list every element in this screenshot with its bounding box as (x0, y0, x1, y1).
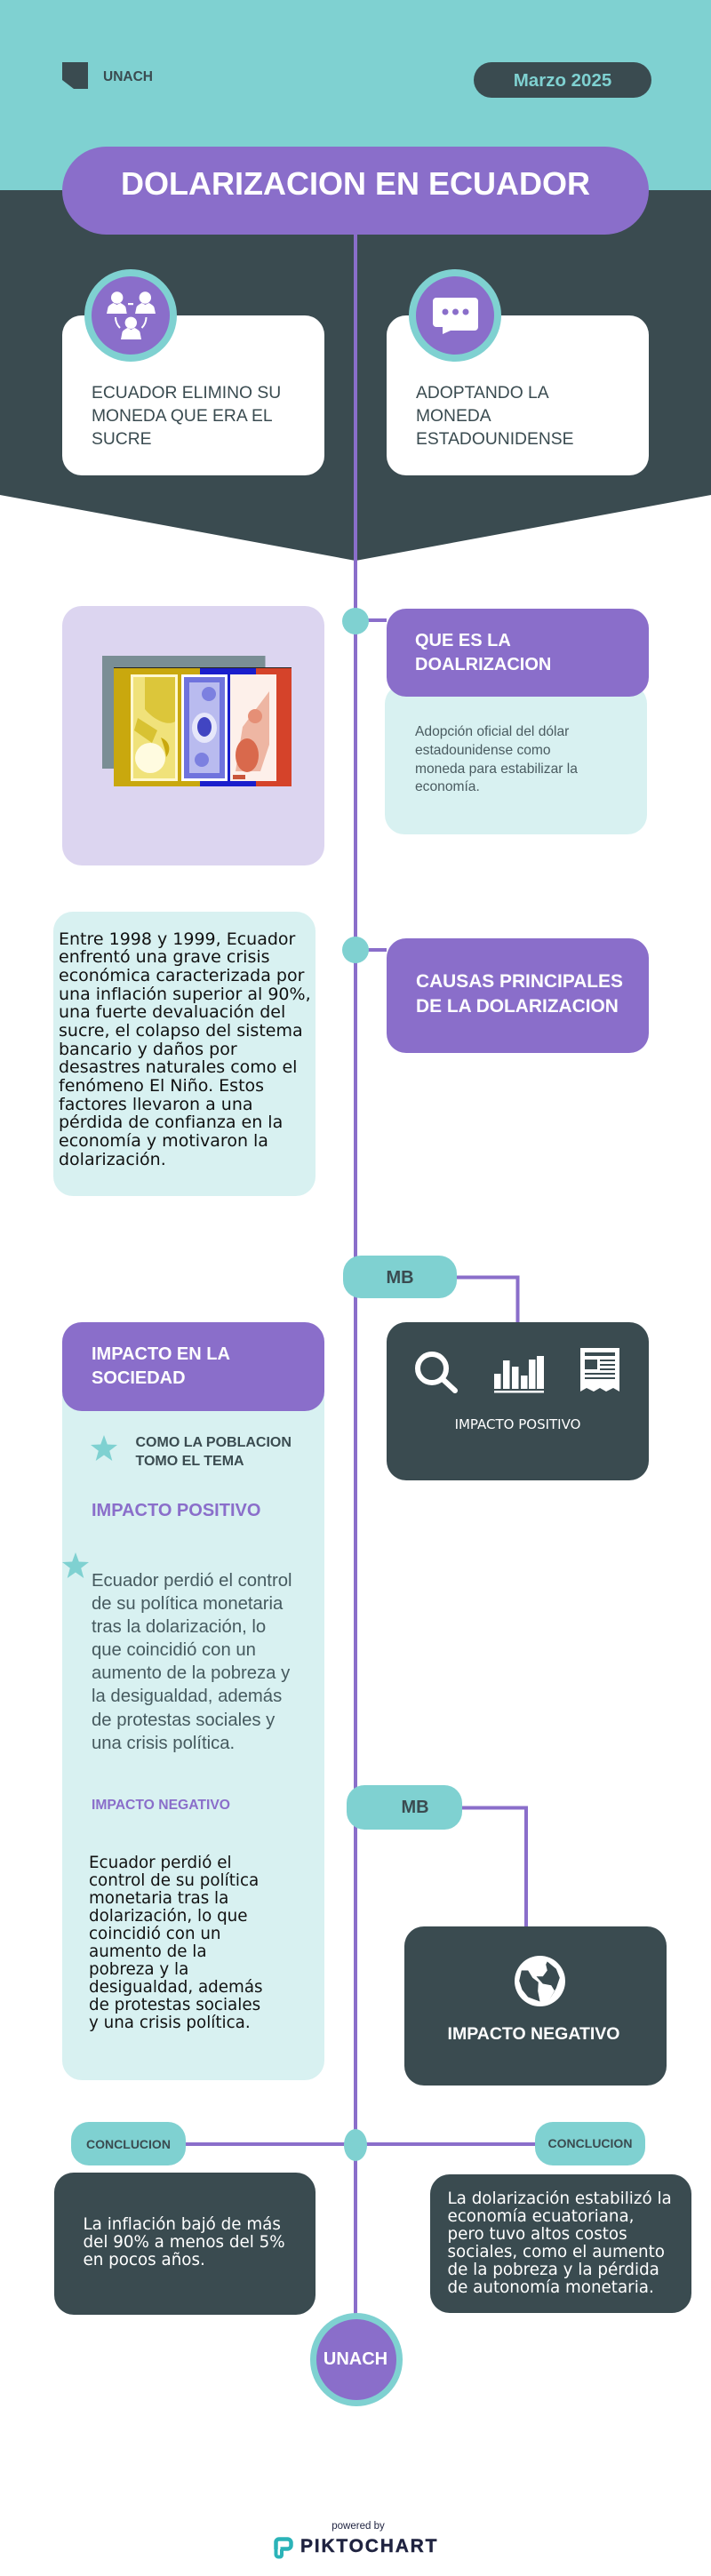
pill: MB 1 (343, 1256, 457, 1298)
icon: logo mark (62, 62, 88, 89)
date pill (474, 62, 651, 98)
conclusion text: de la pobreza y la pérdida (448, 2261, 659, 2279)
card text: SUCRE (92, 430, 151, 449)
conclusion text: economía ecuatoriana, (448, 2207, 635, 2226)
conclusion text: pero tuvo altos costos (448, 2225, 627, 2244)
icon: bar chart (494, 1356, 544, 1393)
panel: moneda estadounidense (387, 269, 649, 475)
central timeline line (354, 233, 357, 2317)
card background (387, 315, 649, 475)
heading text: IMPACTO EN LA (92, 1344, 230, 1364)
impacto negativo label: IMPACTO NEGATIVO (92, 1798, 230, 1813)
impacto negativo text: coincidió con un (89, 1925, 221, 1942)
impacto negativo text: aumento de la (89, 1942, 207, 1960)
description text: moneda para estabilizar la (415, 762, 578, 777)
connector stroke (356, 618, 387, 622)
heading text: DOALRIZACION (415, 654, 551, 674)
heading text: SOCIEDAD (92, 1368, 186, 1388)
badge text: UNACH (324, 2349, 387, 2369)
conclusion text (448, 2189, 672, 2297)
header background band (0, 0, 711, 190)
pill text: MB (401, 1798, 429, 1817)
crisis paragraph: una fuerte devaluación del (59, 1002, 285, 1022)
conclusion text: sociales, como el aumento (448, 2243, 665, 2261)
crisis paragraph: enfrentó una grave crisis (59, 947, 270, 967)
impacto negativo text: monetaria tras la (89, 1889, 228, 1907)
panel label: IMPACTO POSITIVO (455, 1416, 580, 1432)
conclusion horizontal connector (182, 2141, 538, 2145)
impacto positivo text: una crisis política. (92, 1734, 235, 1753)
crisis paragraph: economía y motivaron la (59, 1131, 268, 1151)
badge: UNACH (309, 2313, 402, 2406)
impacto positivo text: Ecuador perdió el control (92, 1571, 292, 1591)
crisis paragraph: fenómeno El Niño. Estos (59, 1076, 264, 1096)
panel: banknotes image (62, 606, 324, 865)
card text: ADOPTANDO LA (416, 384, 549, 403)
connector dot 3 (344, 2129, 367, 2161)
crisis paragraph: económica caracterizada por (59, 966, 304, 985)
pill text: CONCLUCION (86, 2137, 171, 2151)
pill: conclusion right (535, 2122, 645, 2165)
pill: conclusion left (71, 2122, 186, 2165)
icon: star 2 (62, 1552, 89, 1578)
panel: impacto en la sociedad (62, 1322, 324, 2080)
subheading (135, 1435, 292, 1469)
heading text: CAUSAS PRINCIPALES (416, 971, 623, 992)
conclusion text: La inflación bajó de más (84, 2215, 281, 2234)
date text: Marzo 2025 (514, 70, 611, 91)
pill text: MB (386, 1268, 414, 1288)
panel: que es la dolarizacion description (385, 684, 647, 834)
pill: MB 2 (347, 1785, 462, 1829)
icon: piktochart logo (274, 2537, 293, 2559)
dot (342, 937, 369, 963)
arrow: connector MB to impacto positivo (457, 1276, 519, 1322)
powered by text: powered by (332, 2521, 385, 2532)
subheading: TOMO EL TEMA (135, 1454, 244, 1469)
connector dot 2 (342, 937, 387, 963)
title text: DOLARIZACION EN ECUADOR (121, 165, 590, 201)
icon: people (84, 269, 177, 362)
panel: crisis text (53, 912, 316, 1196)
crisis paragraph: dolarización. (59, 1150, 166, 1169)
crisis paragraph: pérdida de confianza en la (59, 1113, 283, 1132)
pill text: CONCLUCION (548, 2136, 632, 2150)
card text (92, 384, 281, 449)
panel: conclusion left text (54, 2173, 316, 2315)
description text: estadounidense como (415, 743, 551, 758)
conclusion text: en pocos años. (84, 2251, 205, 2269)
impacto positivo text: aumento de la pobreza y (92, 1663, 290, 1683)
icon: magnifier (415, 1352, 458, 1393)
heading text (415, 631, 551, 674)
connector stroke (356, 948, 387, 952)
impacto negativo text: dolarización, lo que (89, 1907, 248, 1925)
title (62, 146, 649, 235)
heading text (416, 971, 623, 1017)
panel: conclusion right text (430, 2174, 691, 2313)
description text (415, 724, 578, 794)
impacto positivo text: de protestas sociales y (92, 1711, 275, 1730)
impacto negativo text (89, 1854, 263, 2031)
icon: star 1 (91, 1435, 117, 1461)
crisis paragraph (59, 929, 311, 1169)
impacto positivo text: de su política monetaria (92, 1594, 283, 1614)
conclusion text (84, 2215, 285, 2269)
panel: moneda sucre (62, 269, 324, 475)
icon: newspaper (580, 1348, 619, 1392)
footer: powered by Piktochart (274, 2521, 438, 2559)
heading text: QUE ES LA (415, 631, 511, 650)
conclusion text: La dolarización estabilizó la (448, 2189, 672, 2208)
dot (342, 608, 369, 634)
impacto negativo text: y una crisis política. (89, 2014, 251, 2031)
crisis paragraph: sucre, el colapso del sistema (59, 1021, 303, 1041)
piktochart wordmark: PIKTOCHART (300, 2536, 438, 2556)
subheading: COMO LA POBLACION (135, 1435, 292, 1450)
impacto positivo label: IMPACTO POSITIVO (92, 1501, 260, 1520)
crisis paragraph: bancario y daños por (59, 1040, 237, 1059)
card text: ESTADOUNIDENSE (416, 430, 574, 449)
heading text: DE LA DOLARIZACION (416, 996, 619, 1017)
heading: que es la dolarizacion (387, 608, 649, 697)
card text (416, 384, 574, 449)
heading text (92, 1344, 230, 1388)
impacto negativo text: control de su política (89, 1871, 259, 1889)
card text: ECUADOR ELIMINO SU (92, 384, 281, 403)
crisis paragraph: una inflación superior al 90%, (59, 985, 311, 1004)
impacto negativo text: desigualdad, además (89, 1978, 263, 1996)
logo: UNACH (62, 62, 153, 89)
heading (62, 1322, 324, 1411)
impacto positivo text: que coincidió con un (92, 1640, 256, 1660)
image: banknotes (102, 656, 292, 786)
impacto negativo text: de protestas sociales (89, 1996, 260, 2014)
card background (62, 315, 324, 475)
card text: MONEDA QUE ERA EL (92, 407, 273, 426)
crisis paragraph: desastres naturales como el (59, 1057, 297, 1077)
icon: speech bubble (409, 269, 501, 362)
logo text: UNACH (103, 69, 153, 84)
panel label: IMPACTO NEGATIVO (448, 2024, 619, 2044)
panel: impacto negativo (404, 1926, 667, 2086)
crisis paragraph: factores llevaron a una (59, 1095, 253, 1114)
dark pentagon background (0, 190, 711, 561)
impacto positivo text: tras la dolarización, lo (92, 1617, 266, 1637)
impacto positivo text (92, 1571, 292, 1753)
conclusion text: del 90% a menos del 5% (84, 2233, 285, 2252)
conclusion text: de autonomía monetaria. (448, 2278, 654, 2297)
description text: economía. (415, 779, 480, 794)
connector dot 1 (342, 608, 387, 634)
impacto positivo text: la desigualdad, además (92, 1687, 282, 1706)
card text: MONEDA (416, 407, 491, 426)
description text: Adopción oficial del dólar (415, 724, 569, 739)
icon: globe (515, 1956, 565, 2006)
panel background (62, 1376, 324, 2080)
crisis paragraph: Entre 1998 y 1999, Ecuador (59, 929, 295, 949)
impacto negativo text: pobreza y la (89, 1960, 188, 1978)
heading: causas principales (387, 938, 649, 1053)
arrow: connector MB to impacto negativo (462, 1806, 528, 1926)
impacto negativo text: Ecuador perdió el (89, 1854, 232, 1871)
panel: impacto positivo icons (387, 1322, 649, 1480)
